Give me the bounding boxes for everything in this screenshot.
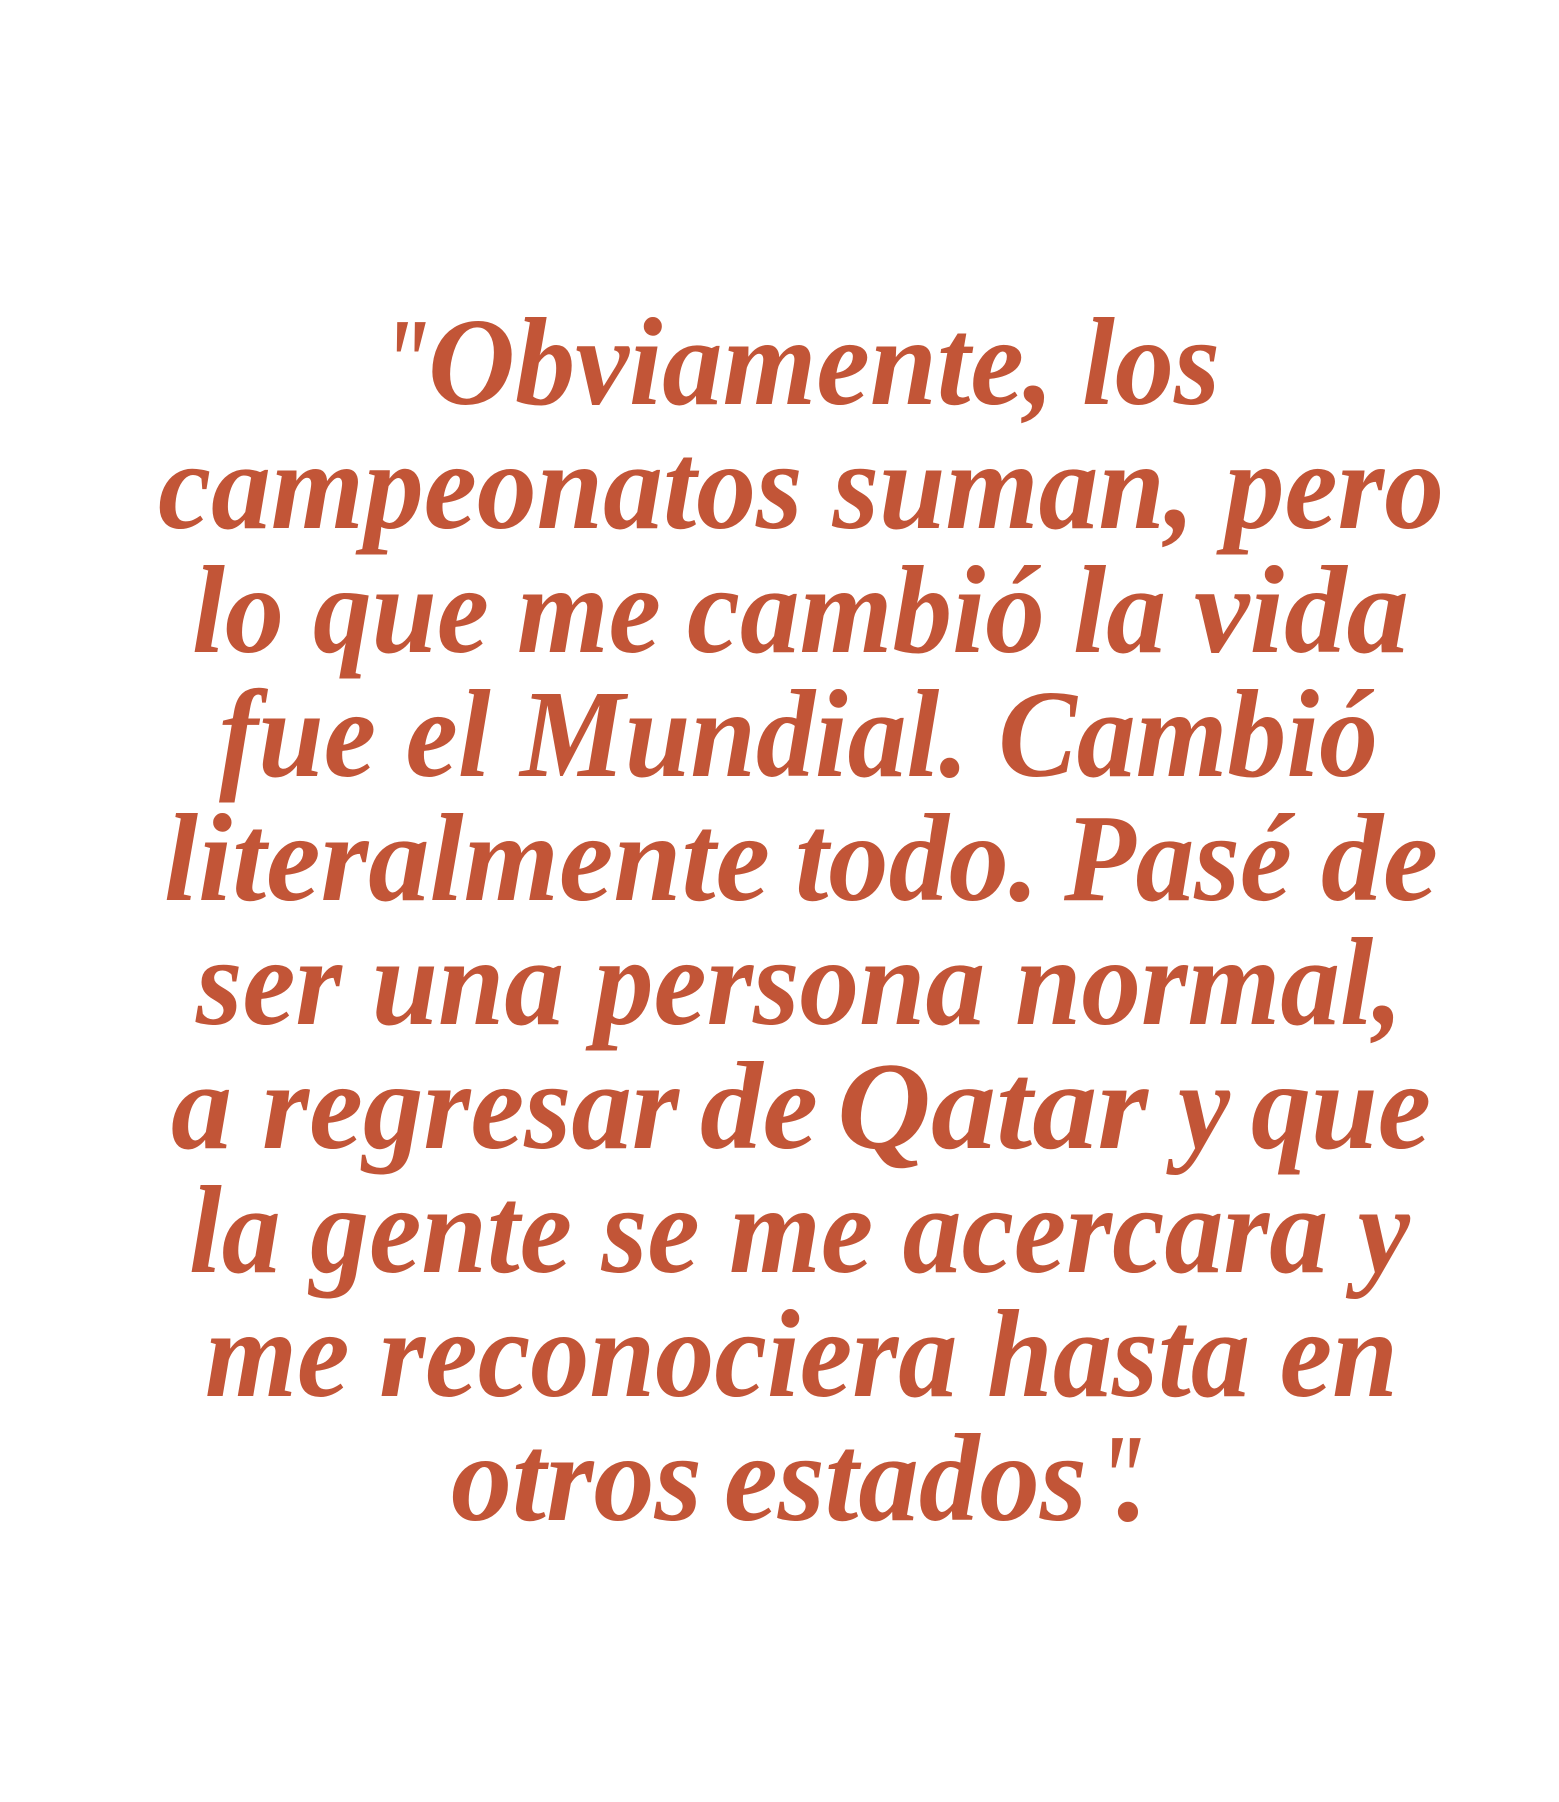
quote line 7: a — [171, 1038, 232, 1176]
quote line 2: campeonatos suman, pero — [158, 418, 1444, 556]
quote line 10: . — [1117, 1410, 1148, 1548]
quote line 9: me reconociera hasta en — [205, 1286, 1398, 1424]
quote line 10: estados — [724, 1410, 1087, 1548]
quote line 3: que — [313, 542, 489, 680]
quote line 3 — [192, 542, 1409, 680]
quote line 3: lo — [192, 542, 284, 680]
quote line 5: Pasé — [1063, 790, 1295, 928]
quote line 1: " — [380, 294, 432, 432]
quote line 5: de — [1321, 790, 1438, 928]
quote line 5: todo. — [795, 790, 1039, 928]
quote line 7: y — [1166, 1038, 1230, 1176]
quote line 7 — [171, 1038, 1431, 1176]
quote line 5 — [164, 790, 1438, 928]
quote line 3: la — [1073, 542, 1166, 680]
quote line 6: ser una persona normal, — [195, 914, 1403, 1052]
quote line 1: Obviamente, — [428, 294, 1054, 432]
quote line 7: Qatar — [837, 1038, 1149, 1176]
quote line 7: regresar — [262, 1038, 680, 1176]
quote line 5: literalmente — [164, 790, 770, 928]
quote line 4: fue el Mundial. Cambió — [219, 666, 1378, 804]
quote line 3: me — [517, 542, 661, 680]
quote line 10 — [451, 1410, 1148, 1548]
quote line 3: vida — [1194, 542, 1409, 680]
quote line 10: " — [1095, 1410, 1147, 1548]
quote line 1: los — [1082, 294, 1220, 432]
quote line 7: de — [700, 1038, 818, 1176]
quote line 3: cambió — [687, 542, 1045, 680]
quote line 8: la gente se me acercara y — [189, 1162, 1410, 1300]
quote line 10: otros — [451, 1410, 702, 1548]
quote line 7: que — [1251, 1038, 1431, 1176]
